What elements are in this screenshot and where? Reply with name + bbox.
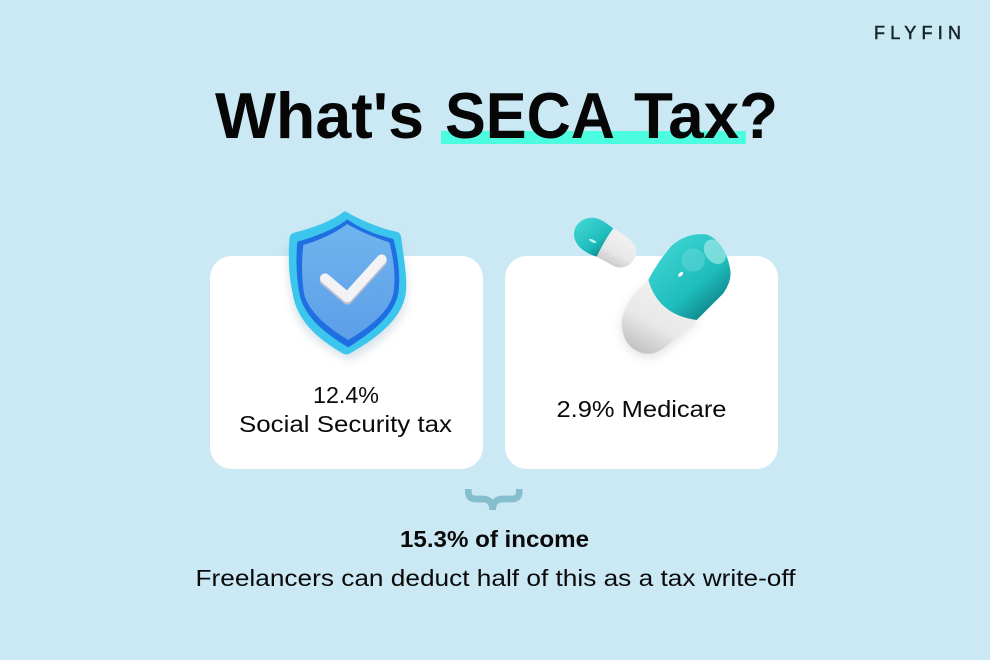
- panel: social security: [210, 211, 483, 469]
- total: 15.3% of income: 15.3% of income: [400, 526, 589, 552]
- label: 12.4% social security tax: [239, 382, 453, 437]
- label: 2.9% medicare: 2.9% Medicare: [556, 396, 726, 422]
- panel: medicare: [505, 218, 778, 469]
- title underline highlight: [441, 131, 746, 144]
- note: deduction: Freelancers can deduct half of this as a tax write-off: [196, 565, 796, 591]
- title: What's: [215, 79, 424, 152]
- icon: large capsule: [622, 234, 731, 357]
- logo: FLYFIN: FLYFIN: [874, 23, 961, 43]
- icon: shield with check mark: [289, 211, 406, 360]
- label: 12.4% social security tax: 12.4%: [313, 382, 379, 408]
- label: 12.4% social security tax: Social Security tax: [239, 411, 453, 437]
- title: SECA: [445, 79, 615, 152]
- icon: small capsule: [574, 218, 636, 268]
- icon: curly brace: [468, 489, 519, 510]
- title: [215, 79, 778, 152]
- title: Tax?: [634, 79, 778, 152]
